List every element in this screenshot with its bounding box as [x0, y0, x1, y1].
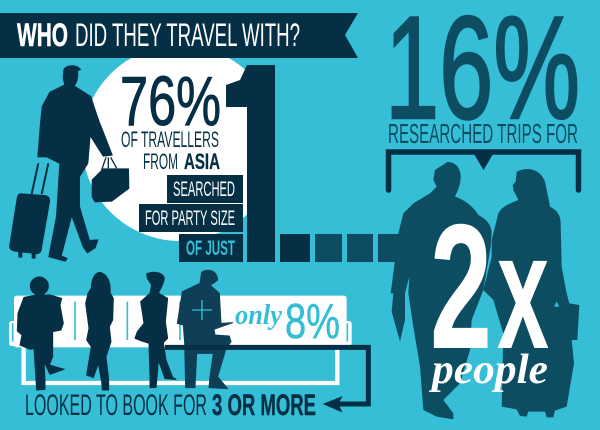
arrow to 3 or more — [165, 347, 368, 413]
icon: couple silhouette — [391, 162, 579, 419]
bench seat back — [9, 296, 352, 383]
stat: 76% of travellers from Asia — [120, 62, 221, 174]
title banner — [0, 13, 358, 58]
icon: plus sign — [192, 300, 212, 320]
label box: for party size: FOR PARTY SIZE — [145, 207, 235, 230]
bench with seated people — [9, 270, 368, 413]
stat: 8%: 8% — [285, 295, 340, 349]
big numeral 1 — [226, 65, 275, 262]
bracket pointer — [388, 152, 578, 190]
stat: 76% of travellers from Asia: OF TRAVELLERS — [121, 127, 219, 152]
label box: of just: OF JUST — [186, 237, 235, 260]
person reading — [17, 277, 64, 390]
woman with hair bun — [135, 272, 176, 388]
stat: 2x: x — [497, 199, 549, 383]
title banner: DID THEY TRAVEL WITH? — [75, 17, 300, 53]
stat: 76% of travellers from Asia: FROM — [143, 149, 178, 174]
row of person squares — [280, 234, 402, 262]
caption: looked to book for 3 or more: 3 OR MORE — [212, 389, 316, 422]
label box: searched: SEARCHED — [173, 178, 235, 201]
highlighted man with laptop — [177, 270, 233, 389]
title banner: WHO — [17, 17, 68, 53]
label box: for party size — [139, 204, 243, 232]
white circle behind the traveller — [85, 58, 247, 241]
label box: searched — [167, 175, 243, 203]
text: people: people — [429, 347, 548, 393]
caption: looked to book for 3 or more: LOOKED TO BOOK FOR — [25, 389, 207, 422]
text: only: only — [235, 299, 282, 331]
stat: 76% of travellers from Asia: ASIA — [184, 149, 220, 174]
stat: 76% of travellers from Asia: 76% — [120, 62, 221, 140]
label box: of just — [179, 234, 243, 262]
woman with long hair — [86, 272, 113, 390]
stat: 2x: 2 — [430, 187, 492, 386]
icon: walking traveller with luggage — [10, 66, 129, 261]
